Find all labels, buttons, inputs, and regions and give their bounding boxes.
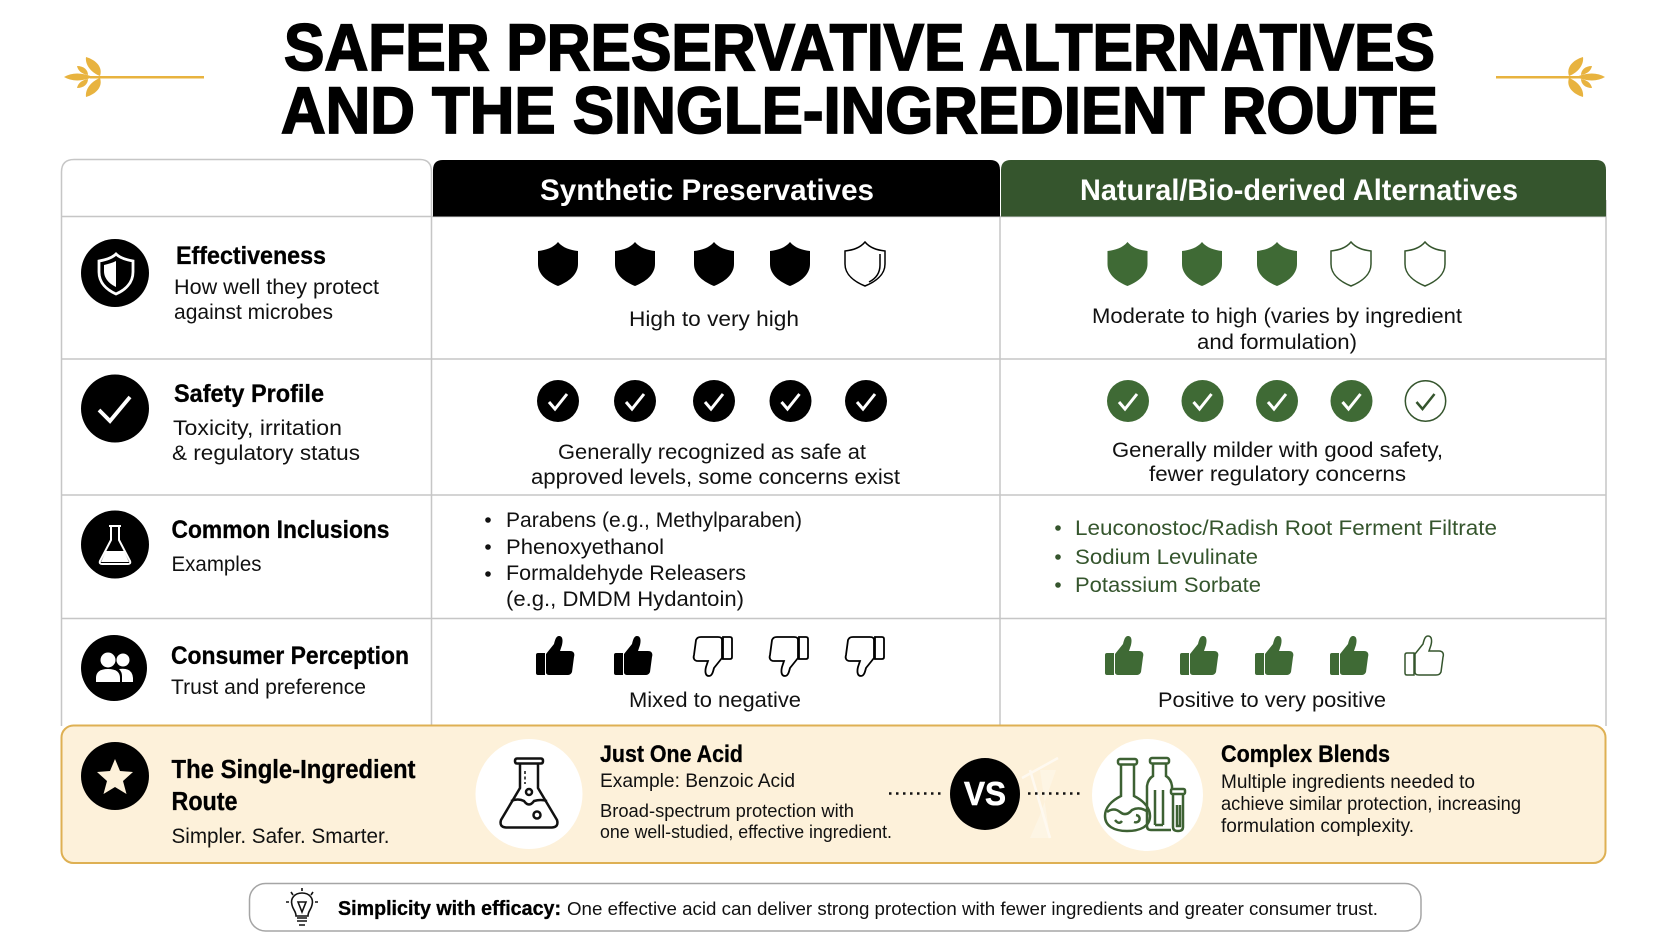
list: synthetic examples: (e.g., DMDM Hydantoin) [506,587,744,611]
row heading: Common Inclusions [172,516,390,544]
rating label: Generally milder with good safety, [1112,438,1443,462]
list: synthetic examples: Parabens (e.g., Methylparaben) [506,508,802,532]
title: AND THE SINGLE-INGREDIENT ROUTE [281,73,1438,147]
dotted connector left [889,792,942,795]
rating label: Mixed to negative [629,688,801,712]
rating label [1092,304,1462,354]
list: natural examples [1055,516,1497,597]
rating label: Moderate to high (varies by ingredient [1092,304,1462,328]
column header: synthetic preservatives [433,160,1000,216]
dotted connector right [1028,792,1081,795]
icon: flask badge [81,510,149,578]
rating label: High to very high [629,307,799,331]
panel tagline: Simpler. Safer. Smarter. [172,824,390,848]
block: just one acid: Broad-spectrum protection with [600,800,854,821]
block: just one acid: Just One Acid [600,741,743,768]
block: complex blends: formulation complexity. [1221,815,1414,837]
row: effectiveness [81,239,1462,354]
row heading: Safety Profile [174,380,324,408]
vs badge: VS [964,775,1006,812]
rating: synthetic thumbs [536,636,884,676]
list: synthetic examples: Formaldehyde Releasers [506,561,746,585]
row: safety profile [81,374,1446,489]
rating label: Positive to very positive [1158,688,1386,712]
ornament: left wheat sprig [64,57,204,97]
rating: natural checks 4 of 5 [1107,380,1446,422]
list: natural examples: Leuconostoc/Radish Root Ferment Filtrate [1075,516,1497,540]
row: consumer perception [81,635,1443,712]
panel: single-ingredient route [62,726,1606,863]
column header: natural alternatives [1001,160,1606,216]
list: synthetic examples: Phenoxyethanol [506,535,664,559]
rating: natural shields 3 of 5 [1108,242,1445,286]
callout text: Simplicity with efficacy: [338,898,561,920]
title [281,10,1438,147]
block: complex blends: Complex Blends [1221,741,1390,768]
rating label: and formulation) [1197,330,1357,354]
faint flask behind vs badge [1022,758,1058,838]
row heading: Consumer Perception [171,642,409,670]
block: just one acid: Example: Benzoic Acid [600,770,795,792]
icon: single flask [476,739,582,849]
row description: & regulatory status [172,441,360,465]
column header: natural alternatives: Natural/Bio-derived Alternatives [1080,174,1518,207]
rating label: fewer regulatory concerns [1149,462,1406,486]
rating label: approved levels, some concerns exist [531,465,900,489]
panel heading [172,756,416,816]
row: common inclusions [81,508,1497,611]
row description: against microbes [174,300,333,324]
panel heading: Route [172,788,238,816]
row description: Trust and preference [171,675,366,699]
callout text: One effective acid can deliver strong protection with fewer ingredients and greater consumer trust. [567,898,1378,919]
block: complex blends: Multiple ingredients needed to [1221,771,1475,793]
icon: shield badge [81,239,149,307]
list: synthetic examples [485,508,802,611]
list: natural examples: Potassium Sorbate [1075,573,1261,597]
callout: simplicity with efficacy [250,884,1421,931]
list: natural examples: Sodium Levulinate [1075,545,1258,569]
block: complex blends: achieve similar protection, increasing [1221,793,1521,815]
rating label: Generally recognized as safe at [558,440,866,464]
row description [172,416,360,465]
row description: Toxicity, irritation [173,416,342,440]
row description: Examples [172,552,262,576]
icon: check badge [81,374,149,442]
rating: synthetic shields 4 of 5 [538,242,885,286]
row description [174,275,379,324]
vs badge [950,758,1020,830]
icon: light bulb [286,888,318,925]
icon: people badge [81,635,147,701]
comparison table grid [61,160,1606,726]
rating label [1112,438,1443,486]
icon: multiple flasks [1092,739,1203,851]
panel heading: The Single-Ingredient [172,756,416,784]
rating label [531,440,900,489]
block: just one acid: one well-studied, effective ingredient. [600,821,892,842]
rating: synthetic checks 5 of 5 [537,380,887,422]
row heading: Effectiveness [176,242,326,270]
block: just one acid [600,741,892,842]
column header: synthetic preservatives: Synthetic Preservatives [540,174,874,207]
rating: natural thumbs [1105,636,1443,675]
icon: star badge [81,742,149,810]
ornament: right wheat sprig [1496,57,1605,97]
row description: How well they protect [174,275,379,299]
block: complex blends [1221,741,1521,837]
title: SAFER PRESERVATIVE ALTERNATIVES [284,10,1435,84]
